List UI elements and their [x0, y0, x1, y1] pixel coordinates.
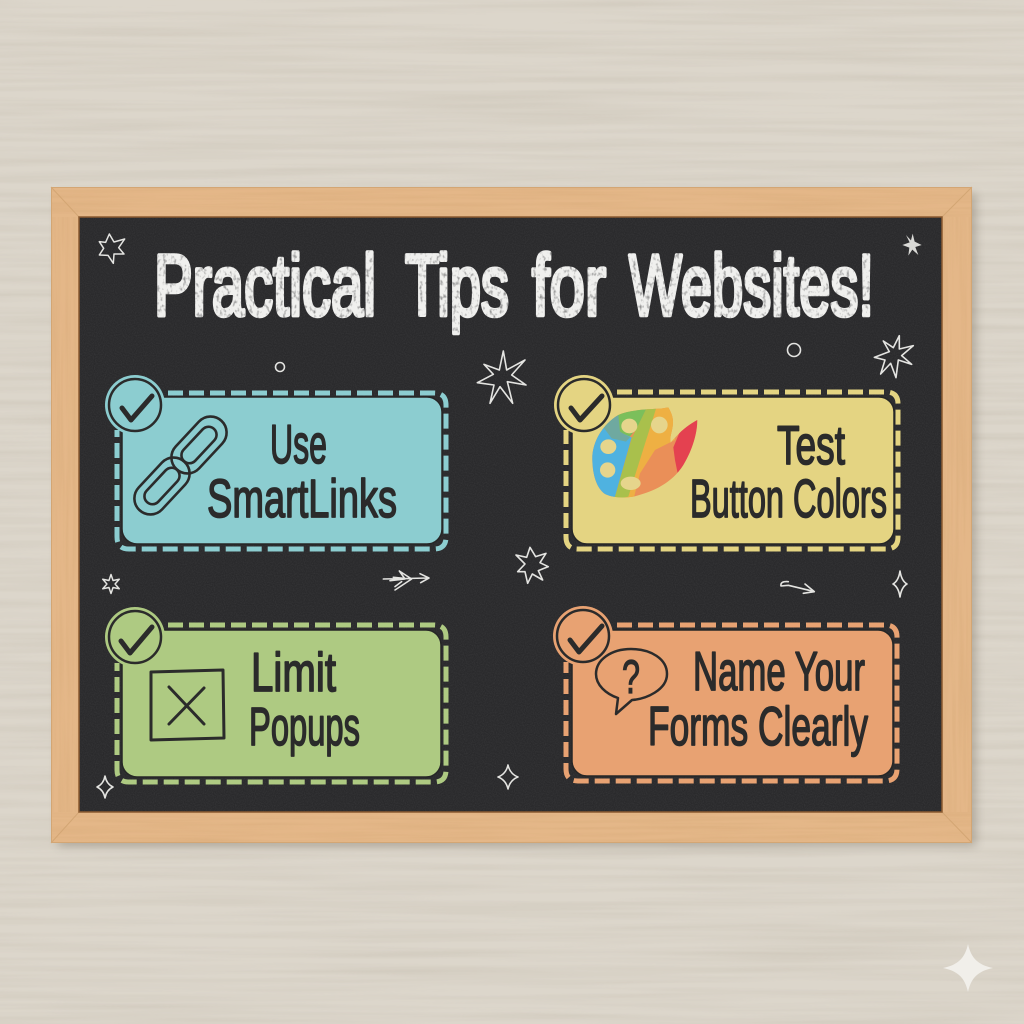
- label: Limit: [251, 641, 336, 703]
- title: [154, 238, 874, 334]
- label: [249, 641, 360, 757]
- label: Popups: [249, 697, 360, 757]
- title: Practical: [154, 238, 376, 334]
- decorative stars and doodles: [97, 234, 922, 798]
- icon: chain link: [128, 410, 233, 521]
- check badge: [553, 606, 613, 666]
- check badge: [105, 607, 165, 667]
- wooden frame: [51, 187, 976, 846]
- icon: popup close box: [151, 670, 224, 740]
- title: for: [532, 238, 606, 334]
- label: SmartLinks: [207, 469, 397, 529]
- label: [207, 413, 397, 529]
- label: Use: [270, 413, 327, 475]
- label: Forms Clearly: [648, 695, 868, 757]
- label: Button Colors: [690, 469, 887, 529]
- check badge: [554, 375, 614, 435]
- icon: question speech bubble: ?: [622, 650, 640, 703]
- title: Websites!: [629, 238, 874, 334]
- icon: colour palette: [592, 408, 698, 498]
- card: Name Your Forms Clearly: [553, 606, 897, 781]
- card: Limit Popups: [105, 607, 446, 782]
- card: Test Button Colors: [554, 375, 898, 549]
- watermark sparkle: [943, 944, 993, 992]
- label: [648, 640, 868, 757]
- check badge: [105, 375, 165, 435]
- label: [690, 414, 887, 529]
- label: Test: [777, 414, 845, 476]
- card: Use SmartLinks: [105, 375, 446, 549]
- icon: question speech bubble: [596, 649, 667, 714]
- label: Name Your: [693, 640, 865, 702]
- chalkboard: [79, 217, 942, 812]
- title: Tips: [405, 238, 509, 334]
